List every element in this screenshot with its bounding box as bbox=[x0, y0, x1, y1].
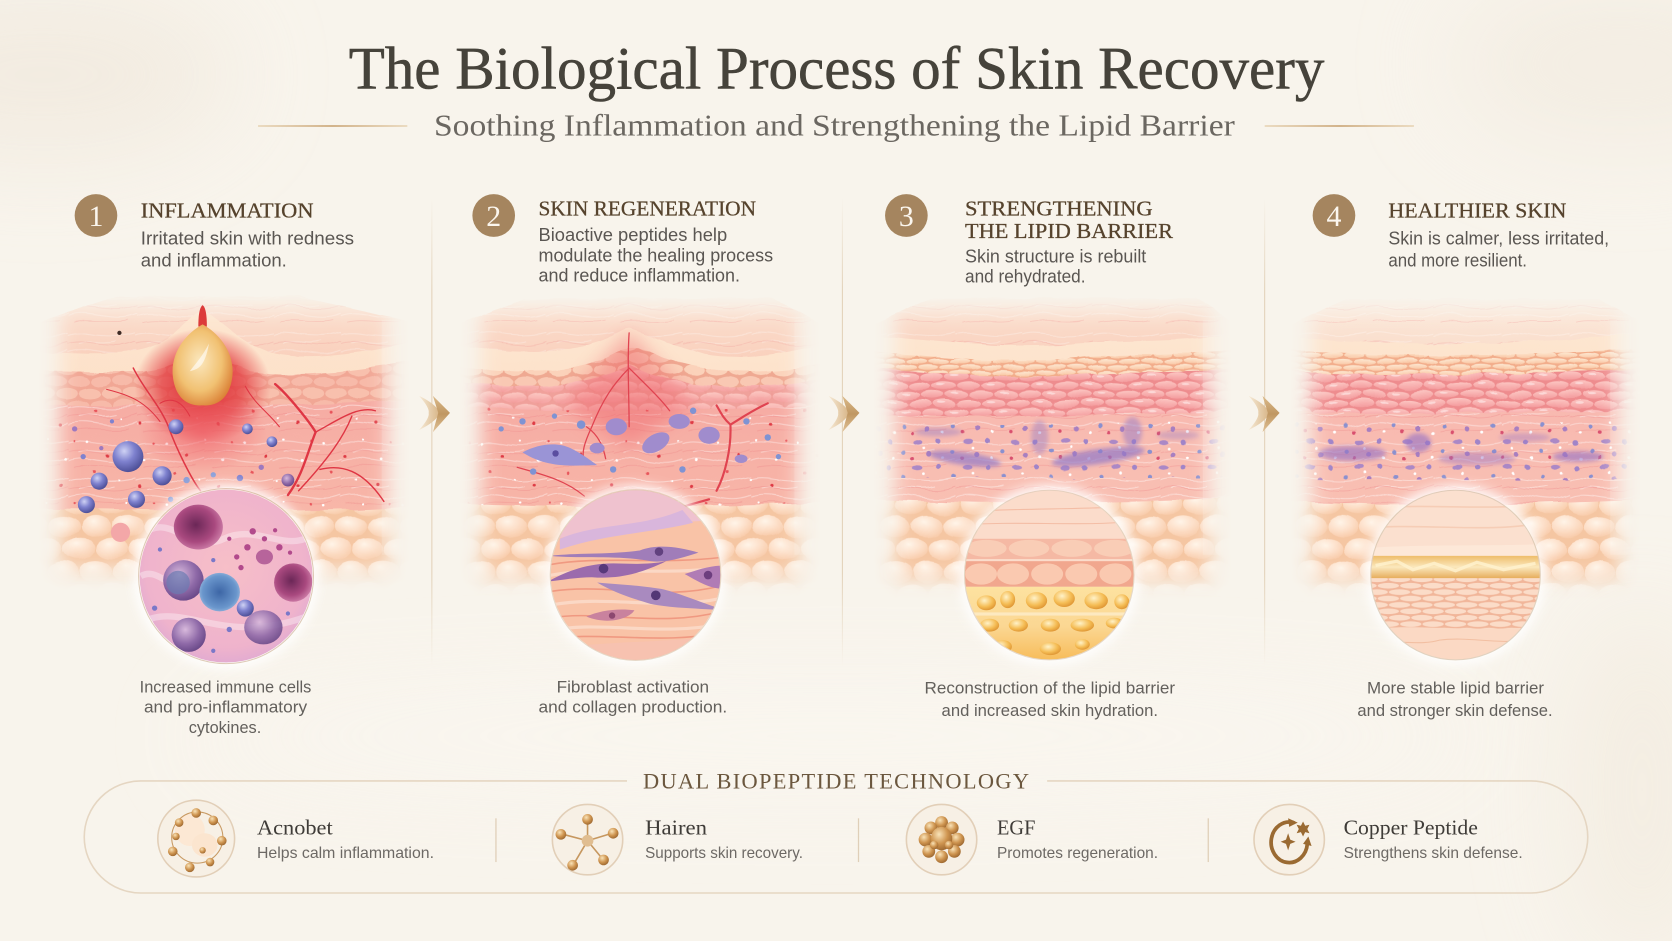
skin cross-section: regenerating bbox=[468, 303, 810, 588]
step 2 number badge bbox=[472, 194, 515, 237]
step 3 description: Skin structure is rebuilt bbox=[965, 246, 1146, 266]
vessels bbox=[107, 368, 384, 501]
panel: dual biopeptide technology bbox=[84, 768, 1588, 893]
EGF text: Promotes regeneration. bbox=[997, 845, 1158, 862]
Hairen text: Supports skin recovery. bbox=[645, 845, 803, 862]
step 2 description: and reduce inflammation. bbox=[538, 266, 740, 286]
divider and arrow 3 bbox=[1249, 197, 1280, 667]
item: EGF bbox=[906, 804, 1158, 875]
EGF text: EGF bbox=[997, 816, 1035, 839]
item: Copper Peptide bbox=[1254, 804, 1523, 875]
section heading: DUAL BIOPEPTIDE TECHNOLOGY bbox=[643, 768, 1029, 793]
step 4 caption bbox=[1357, 678, 1553, 720]
step 1 description: and inflammation. bbox=[141, 251, 287, 271]
step 3 number badge: 3 bbox=[899, 200, 914, 233]
step 1 number badge bbox=[75, 194, 117, 237]
Copper Peptide text: Strengthens skin defense. bbox=[1344, 845, 1523, 862]
step 4 caption: and stronger skin defense. bbox=[1357, 701, 1553, 720]
Acnobet text bbox=[257, 816, 434, 862]
step 3 heading bbox=[965, 197, 1174, 243]
step 1 description bbox=[141, 228, 354, 271]
icon: copper arc and stars bbox=[1254, 804, 1324, 875]
EGF text bbox=[997, 816, 1158, 862]
step 1 caption: cytokines. bbox=[189, 718, 261, 737]
skin cross-section: rebuilding bbox=[880, 303, 1224, 590]
icon: Hairen molecule bbox=[552, 804, 623, 875]
magnified view: immune cells bbox=[133, 483, 319, 669]
Acnobet text: Helps calm inflammation. bbox=[257, 845, 434, 862]
step 4 number badge bbox=[1313, 194, 1355, 237]
step 4 heading: HEALTHIER SKIN bbox=[1388, 199, 1566, 223]
icon: Acnobet molecule ring bbox=[158, 800, 235, 877]
step 2 caption bbox=[538, 677, 727, 717]
magnified view: fibroblasts bbox=[545, 484, 726, 666]
subtitle: Soothing Inflammation and Strengthening the Lipid Barrier bbox=[434, 107, 1236, 142]
step 1 caption bbox=[140, 677, 311, 737]
step 4 description: Skin is calmer, less irritated, bbox=[1388, 228, 1609, 248]
step 1 description: Irritated skin with redness bbox=[141, 228, 354, 248]
magnified view: stable barrier bbox=[1365, 484, 1546, 666]
item: Acnobet bbox=[158, 800, 434, 877]
step 2 description: Bioactive peptides help bbox=[538, 225, 727, 245]
step 3 caption: Reconstruction of the lipid barrier bbox=[925, 678, 1175, 697]
step 4 number badge: 4 bbox=[1327, 200, 1342, 233]
skin cross-section: healthy bbox=[1298, 304, 1632, 590]
step 2 number badge: 2 bbox=[486, 200, 501, 233]
Copper Peptide text: Copper Peptide bbox=[1344, 816, 1478, 839]
step 1 caption: Increased immune cells bbox=[140, 677, 311, 696]
step 4 description: and more resilient. bbox=[1388, 251, 1527, 271]
step 3 caption: and increased skin hydration. bbox=[942, 701, 1158, 720]
panel: step 2 skin regeneration bbox=[453, 194, 826, 717]
step 1 caption: and pro-inflammatory bbox=[144, 698, 308, 717]
step 3 heading: STRENGTHENING bbox=[965, 197, 1153, 221]
step 3 heading: THE LIPID BARRIER bbox=[965, 219, 1174, 243]
panel: step 1 inflammation bbox=[32, 194, 416, 737]
title: The Biological Process of Skin Recovery bbox=[349, 36, 1325, 103]
step 4 description bbox=[1388, 228, 1609, 271]
panel: step 4 healthier skin bbox=[1285, 194, 1647, 720]
step 3 description: and rehydrated. bbox=[965, 267, 1086, 287]
panel: step 3 strengthening the lipid barrier bbox=[869, 194, 1237, 720]
step 4 caption: More stable lipid barrier bbox=[1367, 678, 1544, 697]
Acnobet text: Acnobet bbox=[257, 816, 333, 839]
skin cross-section: inflamed bbox=[47, 302, 400, 581]
step 3 description bbox=[965, 246, 1146, 287]
step 3 caption bbox=[925, 678, 1175, 720]
magnified view: lipid barrier bbox=[959, 484, 1140, 666]
item: Hairen bbox=[552, 804, 803, 875]
divider and arrow 2 bbox=[829, 197, 859, 667]
Copper Peptide text bbox=[1344, 816, 1523, 862]
step 2 description bbox=[538, 225, 773, 286]
immune cells bbox=[72, 419, 294, 542]
Hairen text: Hairen bbox=[645, 816, 708, 839]
step 1 heading: INFLAMMATION bbox=[141, 199, 313, 223]
step 1 number badge: 1 bbox=[89, 200, 103, 233]
step 2 caption: and collagen production. bbox=[538, 698, 727, 717]
Hairen text bbox=[645, 816, 803, 862]
step 2 heading: SKIN REGENERATION bbox=[538, 197, 756, 221]
icon: EGF sphere cluster bbox=[906, 804, 977, 875]
step 2 description: modulate the healing process bbox=[538, 245, 773, 265]
step 2 caption: Fibroblast activation bbox=[557, 677, 709, 696]
rounded frame bbox=[84, 781, 1588, 893]
vessels and fibroblasts bbox=[499, 333, 781, 517]
pimple with pus bbox=[117, 305, 233, 405]
divider and arrow 1 bbox=[419, 197, 450, 667]
step 3 number badge bbox=[885, 194, 928, 237]
